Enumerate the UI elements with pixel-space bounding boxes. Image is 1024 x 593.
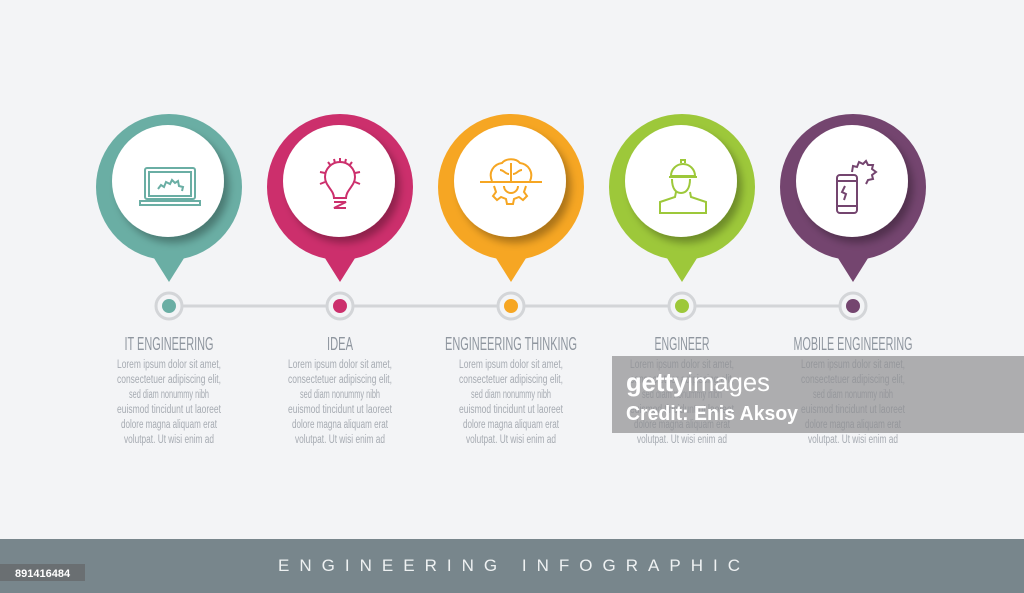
image id: 891416484 bbox=[15, 568, 71, 580]
timeline line bbox=[169, 304, 853, 308]
footer title: ENGINEERING INFOGRAPHIC bbox=[278, 556, 740, 575]
heading: ENGINEER bbox=[654, 334, 710, 354]
pin: green bbox=[609, 114, 755, 282]
text block bbox=[801, 359, 906, 446]
icon: engineer with hard hat bbox=[660, 160, 706, 213]
step 3: engineering thinking bbox=[438, 114, 584, 446]
text block bbox=[117, 359, 222, 446]
heading: IT ENGINEERING bbox=[124, 334, 214, 354]
icon: light bulb bbox=[320, 158, 360, 208]
timeline dot bbox=[498, 293, 524, 319]
watermark bbox=[612, 356, 1024, 433]
pin: teal bbox=[96, 114, 242, 282]
text block bbox=[459, 359, 564, 446]
pin: magenta bbox=[267, 114, 413, 282]
watermark: gettyimages bbox=[626, 367, 770, 397]
heading: MOBILE ENGINEERING bbox=[794, 334, 912, 354]
timeline dot bbox=[840, 293, 866, 319]
image id bbox=[0, 564, 85, 581]
footer band bbox=[0, 539, 1024, 593]
step 4: engineer bbox=[609, 114, 755, 446]
icon: brain and gear bbox=[480, 159, 542, 204]
timeline dot bbox=[156, 293, 182, 319]
icon: phone with gear bbox=[837, 161, 876, 213]
icon: laptop with gear bbox=[140, 168, 200, 205]
text block bbox=[288, 359, 393, 446]
watermark: Credit: Enis Aksoy bbox=[626, 403, 799, 425]
timeline dot bbox=[327, 293, 353, 319]
heading: ENGINEERING THINKING bbox=[445, 334, 577, 354]
pin: orange bbox=[438, 114, 584, 282]
pin: purple bbox=[780, 114, 926, 282]
text block bbox=[630, 359, 735, 446]
step 5: mobile engineering bbox=[780, 114, 926, 446]
heading: IDEA bbox=[327, 334, 353, 354]
timeline dot bbox=[669, 293, 695, 319]
step 1: IT engineering bbox=[96, 114, 242, 446]
step 2: idea bbox=[267, 114, 413, 446]
